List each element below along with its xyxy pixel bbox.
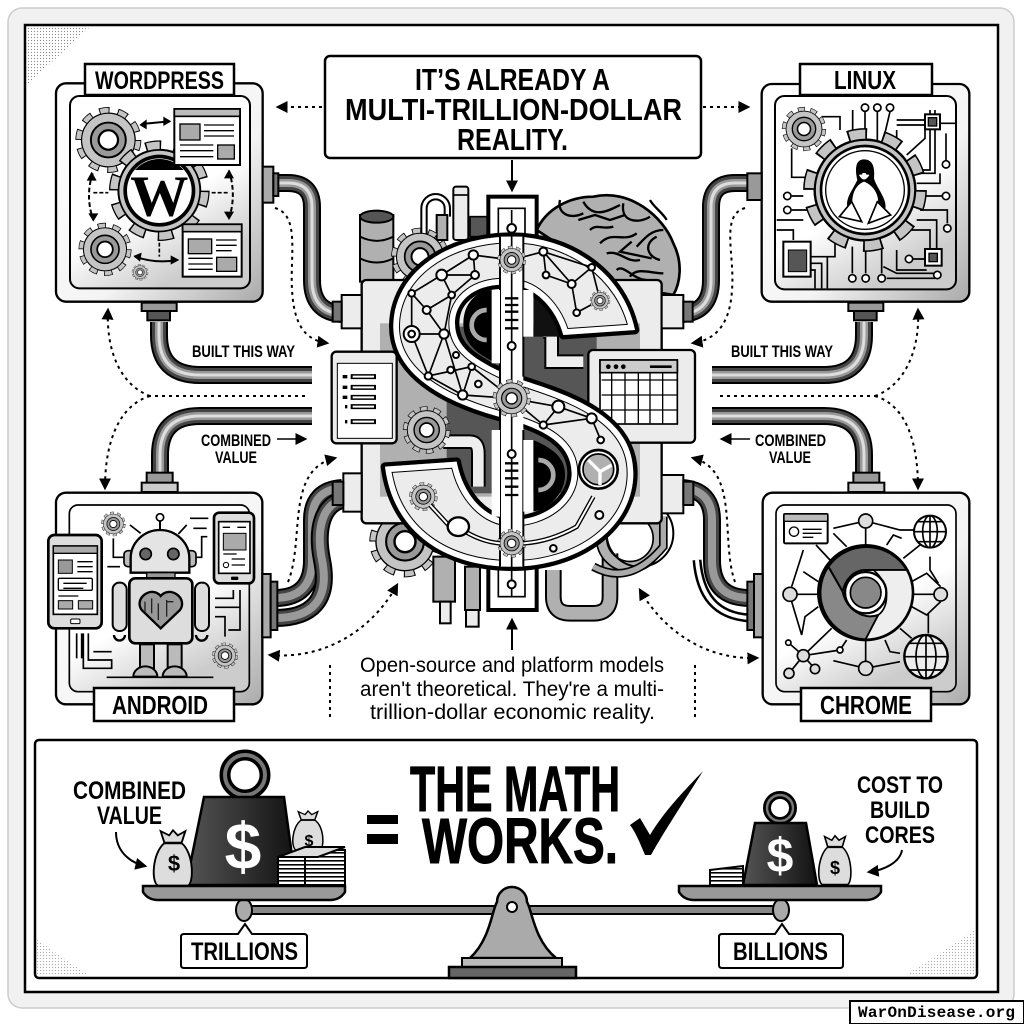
label: cost to build cores: BUILD (870, 797, 930, 824)
money bag and cash right (710, 836, 851, 885)
balance scale (143, 886, 881, 978)
icon: browser window (784, 514, 828, 543)
left control box (332, 352, 397, 443)
right control box (588, 350, 695, 443)
label: combined value right: VALUE (769, 449, 811, 467)
label: combined value: VALUE (97, 802, 162, 830)
label: linux (800, 64, 932, 95)
explanation text: Open-source and platform models (360, 654, 664, 677)
hub plate (362, 280, 662, 523)
money bags and cash left (154, 811, 345, 886)
icon: chrome logo (818, 545, 913, 640)
arrow: title to linux (703, 106, 748, 108)
money bags and cash left: $ (305, 833, 314, 850)
bottom tubes (433, 557, 480, 627)
label: combined value left: COMBINED (201, 432, 271, 450)
arrow: title to wordpress (278, 106, 322, 108)
network nodes inside the dollar sign (404, 224, 618, 588)
dark counters of the dollar sign (463, 290, 565, 512)
icon: globe bottom (904, 635, 948, 678)
tangle of pipes (553, 500, 673, 613)
chrome network lines (788, 521, 941, 673)
icon: tablet (48, 535, 102, 628)
big weight (186, 755, 296, 885)
small weight: $ (767, 830, 794, 883)
dollar vertical bar (492, 210, 533, 597)
central hub machine (332, 187, 695, 627)
top tubes (394, 187, 488, 283)
label: combined value left (201, 432, 305, 467)
title box: REALITY. (457, 122, 568, 157)
panel: wordpress: W (130, 164, 188, 229)
dollar bar nubs (488, 197, 537, 610)
label: built this way left: BUILT THIS WAY (192, 342, 296, 361)
headline: the math works: THE MATH (410, 753, 620, 825)
label: chrome: CHROME (820, 690, 912, 720)
headline: the math works (410, 753, 620, 877)
flange connectors (333, 295, 693, 513)
explanation text: trillion-dollar economic reality. (370, 701, 655, 724)
label: combined value: COMBINED (73, 777, 186, 805)
label: billions (719, 924, 843, 968)
big weight: $ (225, 809, 261, 883)
label: combined value (73, 777, 186, 866)
database cylinder (360, 211, 393, 282)
label: cost to build cores: COST TO (857, 772, 943, 799)
label: billions: BILLIONS (733, 938, 828, 966)
label: built this way right: BUILT THIS WAY (731, 342, 833, 361)
label: wordpress: WORDPRESS (95, 67, 224, 95)
title box (325, 56, 701, 158)
panel: linux (747, 84, 969, 320)
small weight (743, 795, 817, 885)
dollar sign (385, 197, 635, 610)
panel: the math (35, 740, 977, 978)
label: combined value right (722, 432, 826, 467)
arrow: title to dollar (511, 160, 513, 190)
linux circuit traces (777, 110, 955, 288)
panel: chrome (747, 473, 969, 704)
watermark: WarOnDisease.org (858, 1004, 1015, 1022)
bent pipes behind the dollar sign (443, 332, 583, 487)
money bag and cash right: $ (830, 858, 840, 878)
icon: android robot (113, 514, 209, 677)
label: cost to build cores: CORES (865, 822, 935, 849)
icon: phone (214, 513, 254, 583)
label: cost to build cores (857, 772, 943, 872)
dotted arrows between panels and hub (105, 208, 918, 718)
money bags and cash left: $ (168, 851, 180, 876)
label: android: ANDROID (112, 690, 208, 720)
label: trillions (181, 924, 307, 968)
bottom gear (373, 509, 437, 574)
explanation text (360, 654, 664, 724)
panel: wordpress (56, 83, 278, 320)
label: trillions: TRILLIONS (191, 938, 298, 966)
icon: check mark (630, 771, 703, 855)
panel: android (48, 473, 277, 704)
equals sign (367, 815, 398, 844)
label: combined value right: COMBINED (755, 432, 826, 450)
android circuit traces (77, 518, 240, 677)
headline: the math works: WORKS. (422, 805, 618, 877)
label: combined value left: VALUE (215, 449, 257, 467)
icon: tux penguin (839, 159, 891, 223)
pipes connecting panels to the hub (159, 183, 864, 618)
title box: MULTI-TRILLION-DOLLAR (345, 92, 682, 127)
title box: IT’S ALREADY A (415, 62, 610, 97)
arrow: explanation to hub (511, 620, 513, 650)
brain (537, 195, 680, 295)
explanation text: aren't theoretical. They're a multi- (360, 678, 664, 701)
label: linux: LINUX (834, 65, 897, 95)
icon: globe top (914, 516, 946, 548)
